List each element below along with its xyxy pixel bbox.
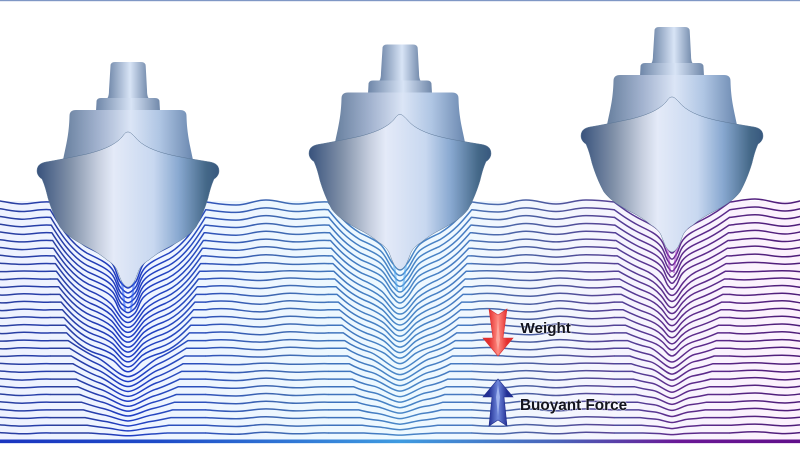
collar xyxy=(368,80,432,94)
top border xyxy=(0,0,800,1)
superstructure xyxy=(607,75,737,137)
seabed line xyxy=(0,440,800,443)
keel compression highlights xyxy=(122,248,677,310)
water streamlines deflected under ship 2 xyxy=(328,202,472,436)
label: Buoyant Force: Buoyant Force xyxy=(520,397,627,414)
hull xyxy=(581,97,763,252)
collar xyxy=(96,98,160,111)
icon: weight arrow (red, pointing down) xyxy=(483,309,513,356)
funnel xyxy=(652,27,692,63)
ship 3: shallowest draft xyxy=(581,27,763,252)
ship 2: medium draft xyxy=(309,44,491,270)
water streamlines: open-water wave sections xyxy=(0,199,800,434)
ship 1: deepest draft xyxy=(37,62,219,287)
hull xyxy=(37,132,219,287)
collar xyxy=(640,63,704,76)
icon: buoyant force arrow (blue, pointing up) xyxy=(483,379,513,426)
water streamlines deflected under ship 3 xyxy=(614,202,730,436)
water background tint xyxy=(0,201,800,444)
water streamlines deflected under ship 1 xyxy=(50,209,206,436)
superstructure xyxy=(63,110,193,172)
label: Weight: Weight xyxy=(520,320,571,337)
funnel xyxy=(380,44,420,80)
hull xyxy=(309,114,491,270)
superstructure xyxy=(335,92,465,154)
funnel xyxy=(108,62,148,98)
